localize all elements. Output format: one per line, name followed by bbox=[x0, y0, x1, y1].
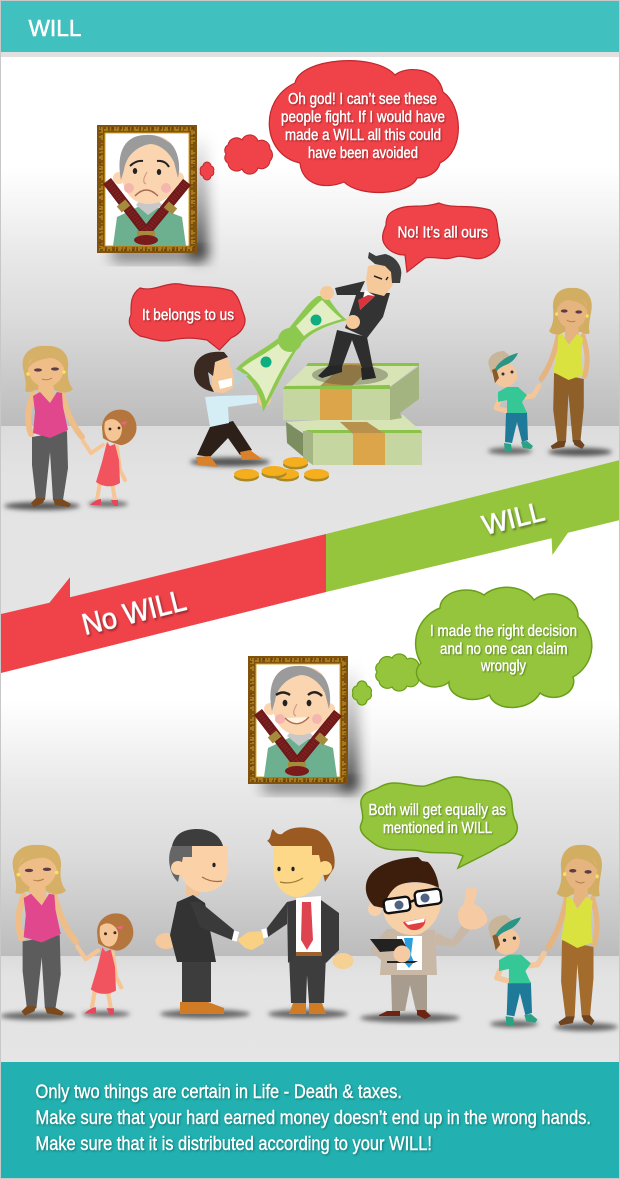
shadow bbox=[360, 1014, 460, 1022]
clasped hands bbox=[237, 931, 264, 950]
label: WILL bbox=[479, 496, 548, 541]
main bubble bbox=[416, 587, 592, 708]
son bbox=[488, 915, 544, 1026]
bubble text: and no one can claim bbox=[440, 641, 568, 658]
son bbox=[488, 351, 539, 452]
shoes bbox=[379, 1010, 431, 1019]
hands bbox=[320, 286, 334, 300]
head bbox=[383, 883, 442, 935]
tiny bubble bbox=[353, 681, 371, 705]
mother bbox=[541, 288, 592, 449]
upper stack bbox=[283, 363, 419, 420]
header bar bbox=[1, 1, 619, 57]
head bbox=[273, 846, 322, 897]
shadow bbox=[268, 1010, 348, 1018]
footer text bbox=[36, 1082, 591, 1155]
hand bbox=[257, 392, 271, 406]
lower stack bbox=[286, 415, 422, 465]
ribbon: WILL bbox=[326, 460, 620, 592]
jacket bbox=[370, 929, 437, 975]
tablet bbox=[370, 939, 418, 963]
belt bbox=[296, 952, 322, 956]
man pulling banknote standing on money bbox=[318, 252, 401, 380]
speech bubble: No, it's all ours bbox=[383, 203, 500, 272]
hair bbox=[366, 857, 439, 908]
coins bbox=[234, 457, 329, 482]
main bubble bbox=[269, 61, 458, 193]
label: No WILL bbox=[79, 584, 190, 642]
legs bbox=[328, 330, 373, 368]
shoes bbox=[289, 1003, 326, 1014]
bubble text bbox=[430, 623, 577, 675]
bubble text bbox=[368, 802, 506, 837]
mother bbox=[13, 845, 76, 1016]
daughter bbox=[83, 410, 136, 506]
bubble text: Both will get equally as bbox=[368, 802, 506, 819]
shadow bbox=[160, 1010, 250, 1018]
shadow bbox=[190, 458, 270, 466]
thought cloud: regret bbox=[200, 61, 458, 193]
legs bbox=[182, 961, 211, 1002]
bubble text: It belongs to us bbox=[142, 307, 234, 324]
shoes bbox=[318, 365, 376, 380]
banknote being pulled bbox=[233, 296, 347, 412]
advisor with glasses and tablet bbox=[360, 857, 487, 1022]
shirt bbox=[205, 395, 257, 427]
shirt and tie bbox=[397, 936, 422, 970]
man pulling banknote from left bbox=[190, 352, 271, 467]
bubble text: No! It’s all ours bbox=[398, 224, 488, 242]
tiny bubble bbox=[200, 162, 214, 180]
footer text: Make sure that it is distributed according to your WILL! bbox=[36, 1134, 432, 1155]
head bbox=[366, 262, 393, 296]
shadow bbox=[0, 1011, 130, 1020]
legs bbox=[197, 421, 252, 457]
small bubble bbox=[225, 135, 272, 174]
jacket bbox=[287, 898, 339, 963]
shadow bbox=[490, 1020, 618, 1031]
arm bbox=[267, 902, 287, 937]
pointing hand bbox=[458, 887, 487, 929]
head bbox=[180, 846, 228, 892]
bubble text bbox=[281, 91, 445, 162]
bubble text: mentioned in WILL bbox=[383, 820, 492, 837]
bubble text: made a WILL all this could bbox=[285, 127, 441, 144]
portrait: sad grandfather bbox=[97, 125, 207, 261]
businessman shaking hands (right) bbox=[237, 827, 354, 1018]
mother bbox=[548, 845, 602, 1025]
suit bbox=[335, 281, 390, 338]
pointing arm bbox=[436, 925, 470, 947]
back hand bbox=[332, 953, 354, 969]
shadow bbox=[488, 448, 612, 456]
footer text: Only two things are certain in Life - Death & taxes. bbox=[36, 1082, 402, 1103]
shirt and tie bbox=[360, 290, 375, 310]
shadow bbox=[4, 501, 128, 510]
thought cloud: right decision bbox=[353, 587, 592, 708]
head bbox=[212, 358, 234, 393]
small bubble bbox=[376, 654, 421, 691]
back hand bbox=[156, 933, 176, 949]
bubble text: wrongly bbox=[480, 658, 526, 675]
jacket bbox=[170, 895, 216, 962]
bubble text: Oh god! I can’t see these bbox=[288, 91, 437, 108]
daughter bbox=[77, 913, 133, 1015]
money stacks bbox=[283, 363, 422, 465]
legs bbox=[289, 955, 326, 1003]
shirt bbox=[296, 896, 321, 952]
mouth bbox=[403, 918, 425, 930]
businessman shaking hands (left) bbox=[156, 829, 250, 1018]
neck bbox=[186, 885, 200, 896]
title: WILL bbox=[28, 15, 82, 41]
speech bubble: It belongs to us bbox=[129, 284, 245, 350]
mother and daughter left (will) bbox=[0, 845, 133, 1020]
mother bbox=[23, 346, 82, 507]
arm bbox=[190, 902, 234, 940]
hand on tablet bbox=[394, 946, 410, 962]
glasses bbox=[383, 888, 442, 914]
speech bubble: both will get equally bbox=[360, 777, 517, 868]
bubble text: people fight. If I would have bbox=[281, 109, 445, 126]
mother and daughter left (no will) bbox=[4, 346, 136, 510]
mother and son right (no will) bbox=[488, 288, 612, 456]
shoes bbox=[196, 450, 262, 467]
bubble text: have been avoided bbox=[308, 145, 418, 162]
ribbon: No WILL bbox=[1, 534, 326, 673]
sad face bbox=[130, 161, 169, 196]
footer bar bbox=[1, 1062, 619, 1178]
portrait: happy grandfather bbox=[248, 656, 358, 792]
bubble text: I made the right decision bbox=[430, 623, 577, 640]
shoes bbox=[180, 1002, 224, 1014]
legs bbox=[391, 975, 427, 1011]
happy face bbox=[276, 692, 322, 724]
mother and son right (will) bbox=[488, 845, 618, 1031]
tie bbox=[301, 902, 313, 950]
